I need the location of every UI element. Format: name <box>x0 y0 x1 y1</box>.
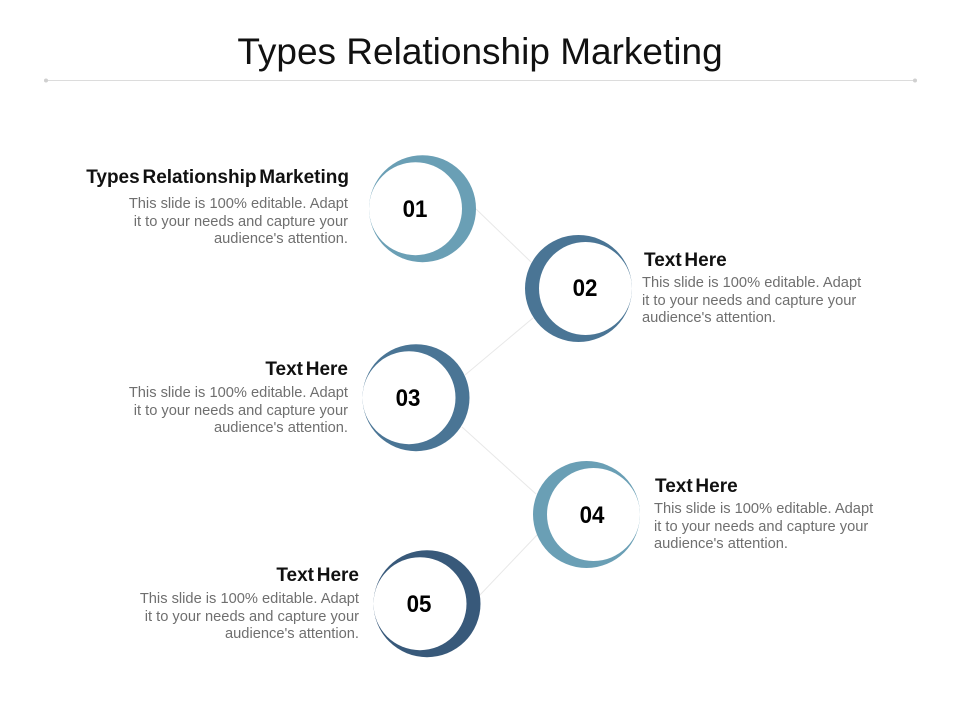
number 05: 05 <box>407 591 431 618</box>
circle 05 <box>374 550 480 657</box>
title divider <box>44 78 917 82</box>
text block 3: This slide is 100% editable. Adapt it to your needs and capture your audience's attention. <box>129 385 348 436</box>
circle 01 <box>369 155 476 262</box>
circle 03 <box>362 344 470 451</box>
number 01: 01 <box>402 196 427 223</box>
number 03: 03 <box>396 385 420 412</box>
circle 02 <box>525 235 632 342</box>
number 02: 02 <box>572 275 597 302</box>
heading 4: Text Here <box>655 476 738 497</box>
heading 5: Text Here <box>276 565 359 586</box>
heading 3: Text Here <box>265 359 348 380</box>
heading 1: Types Relationship Marketing <box>86 167 349 188</box>
connector lines <box>462 209 537 596</box>
text block 4: This slide is 100% editable. Adapt it to your needs and capture your audience's attention. <box>654 501 873 552</box>
number 04: 04 <box>579 502 604 529</box>
text block 1: This slide is 100% editable. Adapt it to your needs and capture your audience's attention. <box>129 196 348 247</box>
text block 5: This slide is 100% editable. Adapt it to your needs and capture your audience's attention. <box>140 591 359 642</box>
heading 2: Text Here <box>644 250 727 271</box>
title: Types Relationship Marketing <box>237 31 723 72</box>
circle 04 <box>533 461 640 568</box>
text block 2: This slide is 100% editable. Adapt it to your needs and capture your audience's attention. <box>642 275 861 326</box>
